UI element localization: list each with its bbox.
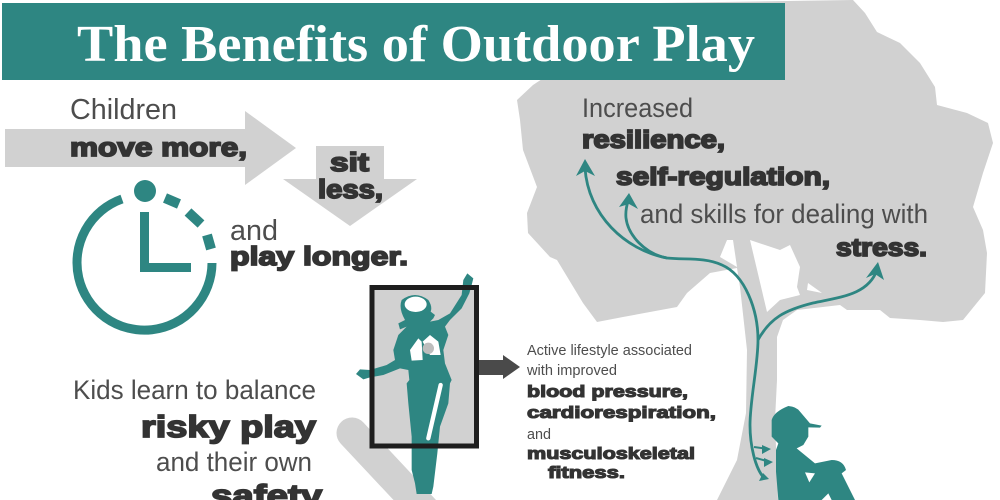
black frame (372, 288, 476, 446)
text: active lifestyle: musculoskeletal (527, 444, 695, 463)
text: active lifestyle: and (527, 426, 551, 443)
text: active lifestyle: fitness. (548, 463, 625, 482)
title banner: The Benefits of Outdoor Play (77, 16, 755, 73)
text: active lifestyle: cardiorespiration, (527, 403, 716, 422)
text: resilience: resilience, (582, 126, 725, 154)
text: resilience: and skills for dealing with (640, 199, 928, 229)
framed panel background (372, 287, 476, 446)
arrow: move more (5, 111, 296, 185)
figure: child with anatomy (356, 273, 473, 494)
text: active lifestyle (526, 342, 716, 482)
text: and play longer: and (230, 215, 278, 247)
tree gaps between branches (720, 240, 822, 312)
text: children move more: Children (70, 94, 177, 126)
teal root and branch arrows (576, 159, 884, 481)
arrow: sit less (283, 146, 417, 226)
text: active lifestyle: with improved (526, 362, 617, 379)
text: and play longer: play longer. (230, 241, 408, 271)
text: risky play and safety: Kids learn to balance (73, 375, 316, 405)
text: resilience (582, 93, 928, 262)
text: risky play and safety: and their own (156, 447, 312, 477)
text: children move more (70, 94, 247, 162)
text: children move more: move more, (70, 132, 247, 162)
text: sit less (318, 147, 383, 204)
text: risky play and safety (73, 375, 330, 500)
text: active lifestyle: blood pressure, (527, 382, 688, 401)
text: resilience: stress. (836, 234, 927, 262)
text: sit less: less, (318, 174, 383, 204)
tree silhouette (517, 0, 993, 500)
balance beam (352, 433, 426, 500)
text: active lifestyle: Active lifestyle associated (527, 342, 692, 359)
title banner (2, 3, 785, 80)
text: sit less: sit (330, 147, 369, 177)
text: and play longer (230, 215, 408, 271)
icon: clock (77, 180, 212, 330)
arrow: to lifestyle text (479, 355, 520, 379)
text: risky play and safety: risky play (141, 409, 317, 444)
text: resilience: self-regulation, (616, 163, 830, 191)
text: resilience: Increased (582, 93, 693, 123)
figure: child sitting under tree (772, 406, 855, 500)
